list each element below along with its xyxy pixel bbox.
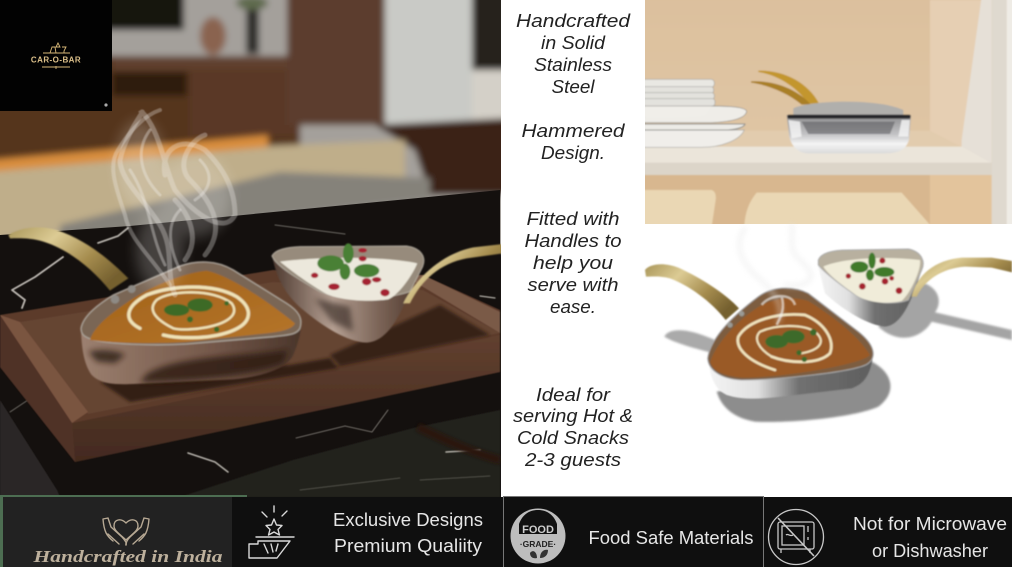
icon: food grade seal: ·GRADE· (520, 539, 556, 549)
blurred room background (0, 0, 520, 250)
feature: material and design: Stainless (534, 54, 612, 75)
logo icon: bar glasses (43, 43, 70, 53)
hammered dark reflections (88, 350, 288, 383)
feature: material and design: Steel (552, 76, 595, 97)
curry pan (645, 264, 873, 399)
logo wordmark: CAR-O-BAR (31, 56, 81, 64)
feature: material and design: Design. (541, 142, 605, 163)
pan body (273, 258, 423, 343)
gold handles (751, 71, 819, 105)
panel: pan on kitchen shelf photo (642, 0, 1012, 227)
logo flourish (42, 66, 70, 69)
steam wisps (113, 110, 235, 295)
feature: serving use: Ideal for (536, 384, 611, 405)
handle (645, 264, 739, 320)
yogurt pan (818, 249, 1012, 327)
badge: handcrafted in India (0, 495, 247, 567)
soft steam cloud (116, 120, 231, 290)
feature: serving use (513, 384, 633, 470)
cast shadows (664, 282, 1012, 422)
feature: handles: help you (533, 252, 613, 273)
handle (912, 258, 1012, 297)
pomegranate (846, 258, 902, 294)
icon: star on serving hand (249, 506, 294, 558)
brass handle (403, 244, 503, 303)
label: Exclusive Designs (333, 509, 483, 530)
badge: exclusive designs: Premium Qualiity (334, 535, 483, 556)
steam wisp over curry (762, 296, 795, 325)
rivets (111, 295, 119, 304)
rivets (727, 322, 733, 328)
cilantro (765, 329, 817, 362)
wooden tray (0, 270, 500, 462)
small sparkle (104, 103, 108, 107)
stacked plates (642, 79, 747, 147)
stacked hammered pans (787, 102, 911, 153)
mint (850, 253, 894, 281)
badge: exclusive designs (249, 506, 483, 558)
cream swirl (738, 314, 831, 370)
feature: serving use: Cold Snacks (517, 427, 629, 448)
feature: material and design: Hammered (522, 120, 625, 141)
feature: handles (524, 208, 622, 317)
panel: feature text column (501, 0, 645, 497)
panel: studio shot on white (645, 225, 1012, 497)
badge: food safe materials (510, 508, 754, 564)
pan rim (81, 262, 301, 345)
label: Food Safe Materials (588, 527, 754, 548)
feature: material and design (516, 10, 631, 163)
curry pan with handle (8, 227, 302, 384)
steam (113, 110, 235, 295)
cream swirl (129, 287, 248, 338)
cilantro garnish (164, 298, 229, 332)
hammered reflection (315, 298, 353, 332)
yogurt (280, 258, 417, 301)
feature: material and design: Handcrafted (516, 10, 631, 31)
storage baskets (642, 190, 932, 227)
label: Not for Microwave (853, 513, 1007, 534)
feature: serving use: 2-3 guests (524, 449, 621, 470)
feature: handles: Fitted with (526, 208, 620, 229)
feature: handles: serve with (528, 274, 618, 295)
steam (739, 225, 811, 322)
icon: hands holding heart (103, 518, 149, 545)
brass handle (8, 227, 128, 291)
feature: serving use: serving Hot & (513, 405, 633, 426)
badge: not for microwave or dishwasher (768, 510, 1007, 564)
pomegranate seeds (311, 248, 390, 296)
yogurt pan with handle (272, 243, 503, 343)
black marble counter (0, 190, 500, 497)
badge: not for microwave or dishwasher: or Dishwasher (872, 540, 988, 561)
feature: handles: ease. (550, 296, 596, 317)
feature: material and design: in Solid (541, 32, 606, 53)
logo block (0, 0, 112, 111)
feature: handles: Handles to (524, 230, 622, 251)
handcrafted wordmark: Handcrafted in India (32, 547, 223, 566)
shelf (642, 131, 992, 227)
curry surface (90, 271, 295, 343)
icon: food grade seal: FOOD (522, 524, 554, 536)
icon: food grade seal (510, 508, 566, 564)
icon: crossed out microwave (768, 510, 824, 564)
pan body (81, 320, 302, 384)
panel: lifestyle photo on marble counter (0, 0, 520, 497)
panel: feature icon strip (0, 495, 1012, 567)
tray shadows (100, 305, 490, 402)
mint garnish (317, 243, 379, 280)
